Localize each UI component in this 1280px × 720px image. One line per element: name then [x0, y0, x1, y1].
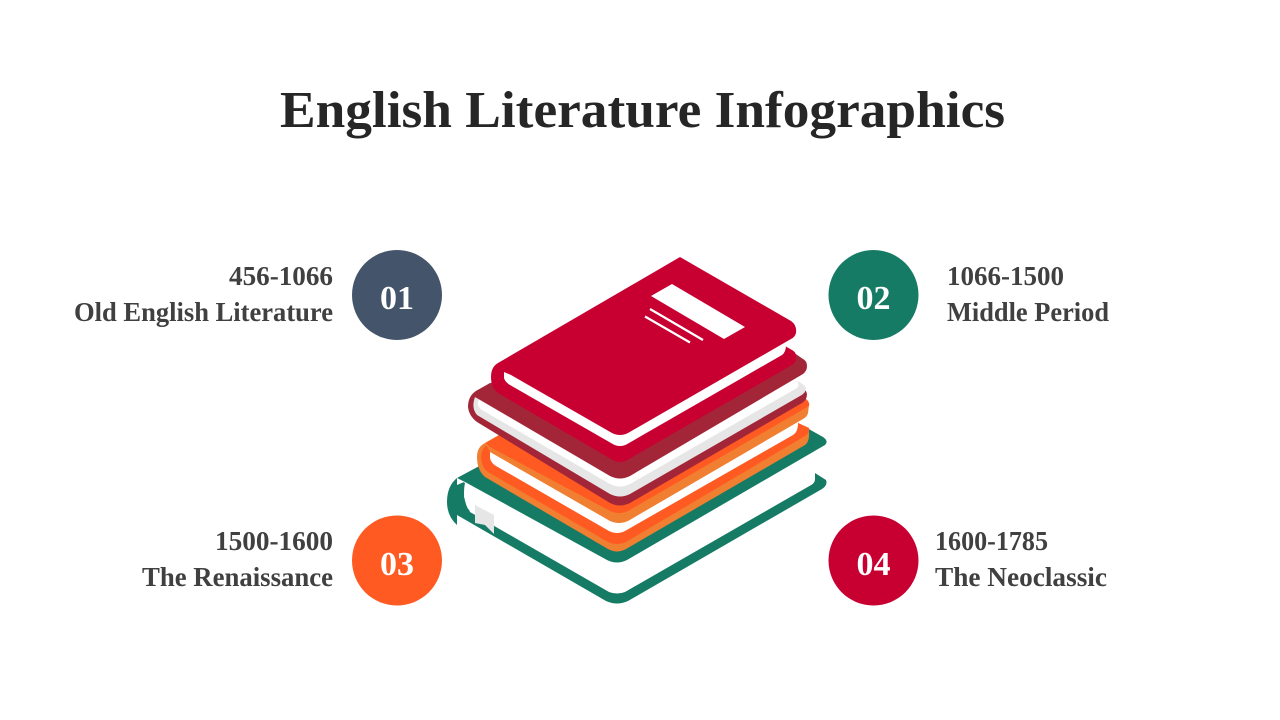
label 01: 456-1066 — [229, 261, 333, 291]
circle 04 — [828, 516, 918, 606]
item 04 — [828, 516, 1107, 606]
label 02 — [947, 261, 1109, 327]
cover label — [651, 284, 745, 339]
book: dark red — [468, 340, 807, 506]
label 03 — [142, 526, 333, 592]
title: English Literature Infographics — [280, 82, 1005, 139]
label 04: The Neoclassic — [935, 562, 1107, 592]
item 02 — [828, 250, 1109, 340]
label 04 — [935, 526, 1107, 592]
circle 01 — [352, 250, 442, 340]
circle 02 — [828, 250, 918, 340]
item 01 — [74, 250, 442, 340]
cover lines — [645, 309, 703, 342]
book: green bottom — [447, 423, 827, 604]
circle 03: 03 — [380, 546, 414, 583]
book: orange — [477, 399, 809, 552]
circle 02: 02 — [856, 280, 890, 317]
label 03: The Renaissance — [142, 562, 333, 592]
item 03 — [142, 516, 442, 606]
book: red top — [491, 257, 796, 462]
label 02: Middle Period — [947, 297, 1109, 327]
circle 03 — [352, 516, 442, 606]
illustration: stack of books — [447, 257, 827, 604]
circle 01: 01 — [380, 280, 414, 317]
label 02: 1066-1500 — [947, 261, 1064, 291]
label 01 — [74, 261, 333, 327]
circle 04: 04 — [856, 546, 890, 583]
label 01: Old English Literature — [74, 297, 333, 327]
label 04: 1600-1785 — [935, 526, 1048, 556]
bookmark — [475, 505, 494, 534]
label 03: 1500-1600 — [215, 526, 333, 556]
